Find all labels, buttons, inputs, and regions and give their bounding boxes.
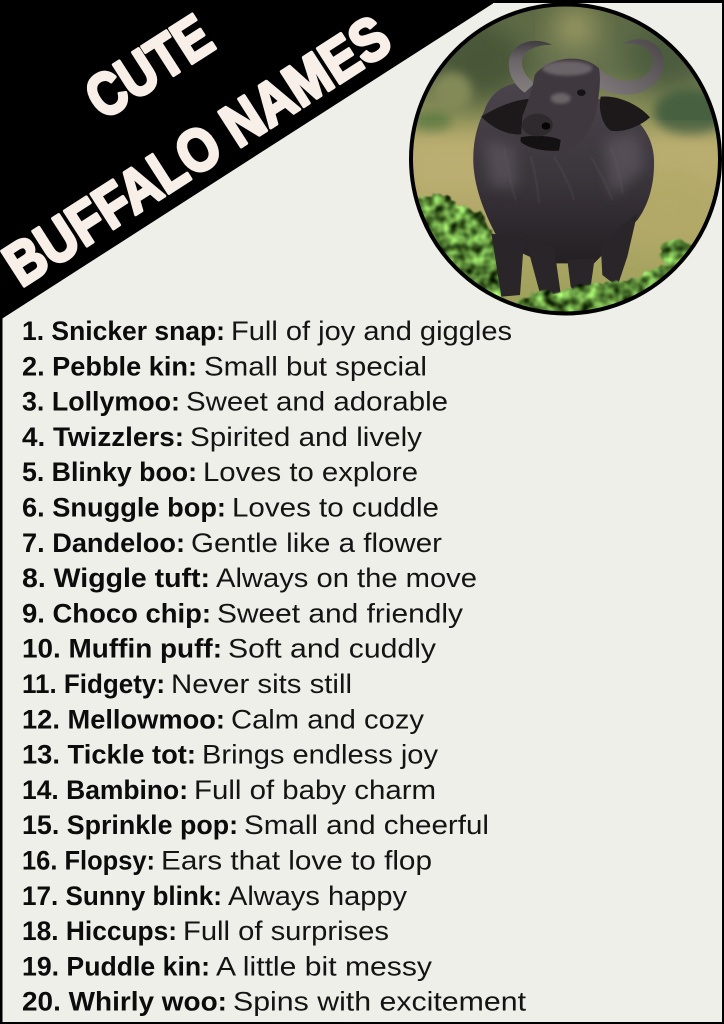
item 11: 11. Fidgety:: [22, 669, 165, 699]
item 6: [22, 492, 439, 522]
item 5: 5. Blinky boo:: [22, 457, 197, 487]
item 18: [22, 916, 389, 946]
item 16: Ears that love to flop: [161, 846, 432, 876]
item 10: [22, 634, 437, 664]
face blaze: [551, 93, 571, 104]
forehead highlight: [542, 61, 592, 76]
item 16: 16. Flopsy:: [22, 846, 155, 876]
item 1: 1. Snicker snap:: [22, 316, 225, 346]
left ear: [481, 99, 528, 134]
item 3: 3. Lollymoo:: [22, 387, 180, 417]
item 10: 10. Muffin puff:: [22, 634, 222, 664]
item 12: 12. Mellowmoo:: [22, 704, 225, 734]
item 13: [22, 740, 439, 770]
item 9: Sweet and friendly: [217, 598, 464, 628]
item 20: [22, 987, 527, 1017]
item 2: 2. Pebble kin:: [22, 351, 197, 381]
item 9: 9. Choco chip:: [22, 598, 211, 628]
item 2: Small but special: [204, 351, 427, 381]
head: [521, 58, 600, 134]
right horn: [594, 39, 664, 95]
eye: [577, 89, 586, 96]
buffalo legs: [491, 213, 637, 297]
item 18: 18. Hiccups:: [22, 916, 177, 946]
names list: [22, 316, 527, 1017]
foliage: left bush behind the legs: [418, 192, 506, 300]
right ear: [600, 97, 650, 131]
item 19: A little bit messy: [216, 951, 433, 981]
item 14: [22, 775, 436, 805]
item 16: [22, 846, 432, 876]
item 10: Soft and cuddly: [228, 634, 437, 664]
item 3: Sweet and adorable: [186, 387, 448, 417]
photo ring: [411, 4, 720, 314]
item 1: [22, 316, 512, 346]
item 14: 14. Bambino:: [22, 775, 188, 805]
item 8: 8. Wiggle tuft:: [22, 563, 210, 593]
photo: buffalo in a circular frame: [404, 0, 724, 325]
black diagonal title banner: [0, 0, 493, 320]
item 17: [22, 881, 408, 911]
item 6: 6. Snuggle bop:: [22, 492, 226, 522]
item 17: 17. Sunny blink:: [22, 881, 222, 911]
item 13: Brings endless joy: [202, 740, 439, 770]
nose: [522, 114, 553, 136]
item 4: 4. Twizzlers:: [22, 422, 184, 452]
item 3: [22, 387, 448, 417]
item 15: Small and cheerful: [244, 810, 489, 840]
buffalo fur streaks: [513, 159, 612, 202]
item 7: 7. Dandeloo:: [22, 528, 185, 558]
photo background: trees and grass: [413, 6, 718, 304]
item 15: [22, 810, 489, 840]
item 5: Loves to explore: [203, 457, 418, 487]
item 20: 20. Whirly woo:: [22, 987, 227, 1017]
item 13: 13. Tickle tot:: [22, 740, 196, 770]
item 8: Always on the move: [216, 563, 477, 593]
item 4: Spirited and lively: [190, 422, 423, 452]
item 19: 19. Puddle kin:: [22, 951, 210, 981]
foliage: bottom plants in front of the legs: [515, 238, 692, 312]
item 17: Always happy: [228, 881, 408, 911]
item 12: Calm and cozy: [231, 704, 425, 734]
item 12: [22, 704, 425, 734]
item 2: [22, 351, 427, 381]
buffalo: [473, 39, 664, 297]
left horn: [509, 41, 552, 93]
item 7: Gentle like a flower: [191, 528, 442, 558]
item 1: Full of joy and giggles: [231, 316, 512, 346]
item 5: [22, 457, 418, 487]
item 20: Spins with excitement: [233, 987, 527, 1017]
item 14: Full of baby charm: [194, 775, 436, 805]
title: Cute Buffalo Names: [0, 2, 402, 299]
buffalo body: [473, 83, 654, 263]
item 18: Full of surprises: [183, 916, 389, 946]
item 9: [22, 598, 464, 628]
item 4: [22, 422, 423, 452]
buffalo coat highlights: [484, 133, 646, 197]
item 7: [22, 528, 442, 558]
item 8: [22, 563, 477, 593]
nostril: [542, 122, 550, 130]
item 6: Loves to cuddle: [232, 492, 439, 522]
item 15: 15. Sprinkle pop:: [22, 810, 238, 840]
item 11: Never sits still: [171, 669, 352, 699]
mouth: [521, 136, 561, 151]
item 11: [22, 669, 352, 699]
item 19: [22, 951, 433, 981]
